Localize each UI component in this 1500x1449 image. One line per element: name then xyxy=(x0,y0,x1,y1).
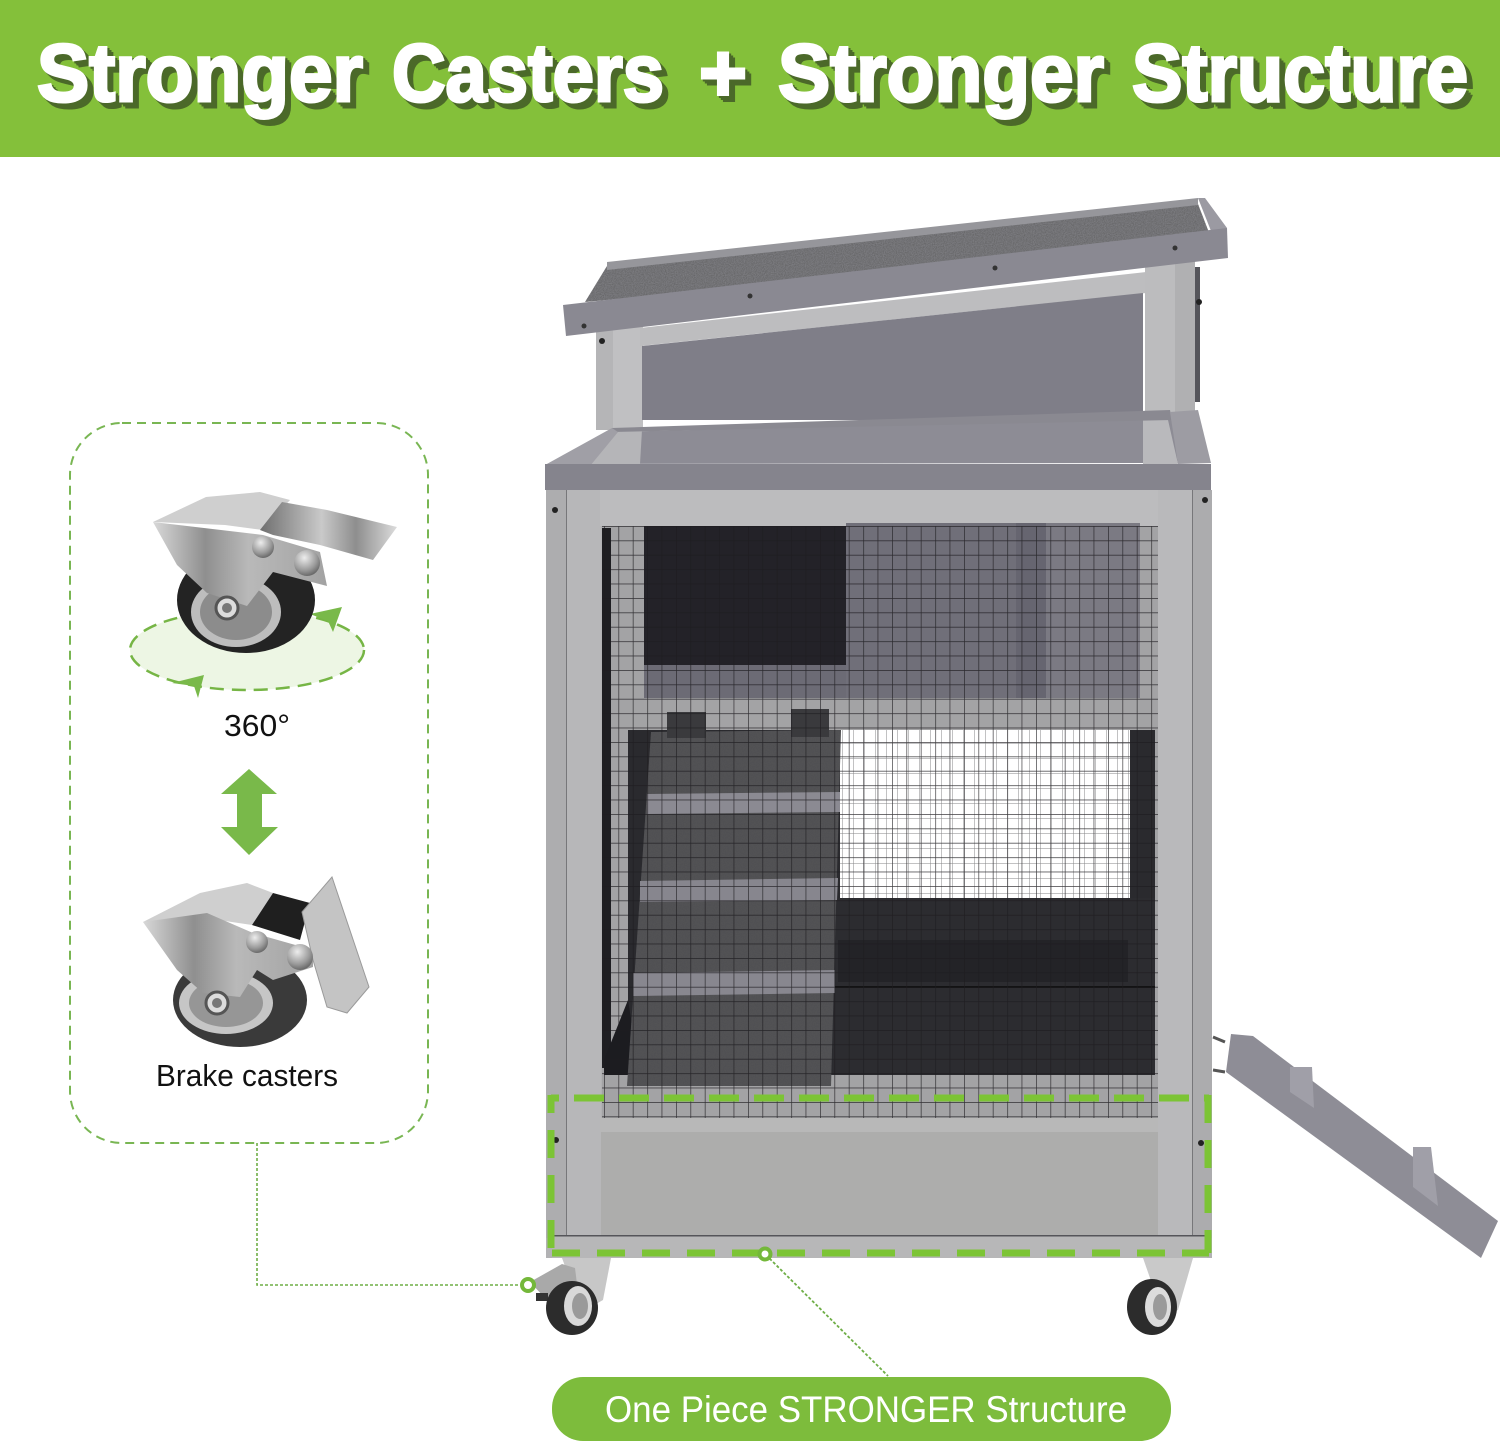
callout pill xyxy=(552,1377,1171,1441)
connector: panel to caster xyxy=(257,1143,520,1285)
title: Stronger xyxy=(37,28,363,119)
base board xyxy=(552,1118,1207,1258)
icon: swivel ring xyxy=(130,607,364,698)
icon: brake caster xyxy=(143,877,369,1047)
interior upper xyxy=(602,523,1158,1118)
highlight: one-piece base outline xyxy=(551,1095,1209,1253)
title xyxy=(37,28,1468,119)
main frame xyxy=(546,490,1212,1258)
interior lower xyxy=(604,730,1155,1075)
title: Stronger xyxy=(778,28,1104,119)
title: + xyxy=(699,28,747,119)
illustration: rabbit hutch xyxy=(545,198,1228,1258)
360 degree label: 360° xyxy=(224,708,290,743)
header banner xyxy=(0,0,1500,157)
right caster xyxy=(1127,1258,1193,1335)
marker: caster dot xyxy=(522,1279,534,1291)
marker: base dot xyxy=(760,1248,770,1260)
glass top frame xyxy=(545,410,1211,490)
roof xyxy=(563,198,1228,344)
side ramp xyxy=(1213,1034,1498,1258)
upper house xyxy=(596,250,1200,430)
wire mesh xyxy=(602,526,1158,1118)
icon: swivel caster xyxy=(153,492,397,653)
icon: double arrow xyxy=(221,769,278,855)
brake casters label: Brake casters xyxy=(156,1058,338,1093)
inner ramp xyxy=(625,709,845,1088)
title: Structure xyxy=(1132,28,1468,119)
panel: caster details xyxy=(70,423,428,1143)
title: Casters xyxy=(392,28,664,119)
connector: base to pill xyxy=(766,1255,888,1376)
left caster xyxy=(530,1258,611,1335)
callout pill: One Piece STRONGER Structure xyxy=(605,1389,1127,1430)
